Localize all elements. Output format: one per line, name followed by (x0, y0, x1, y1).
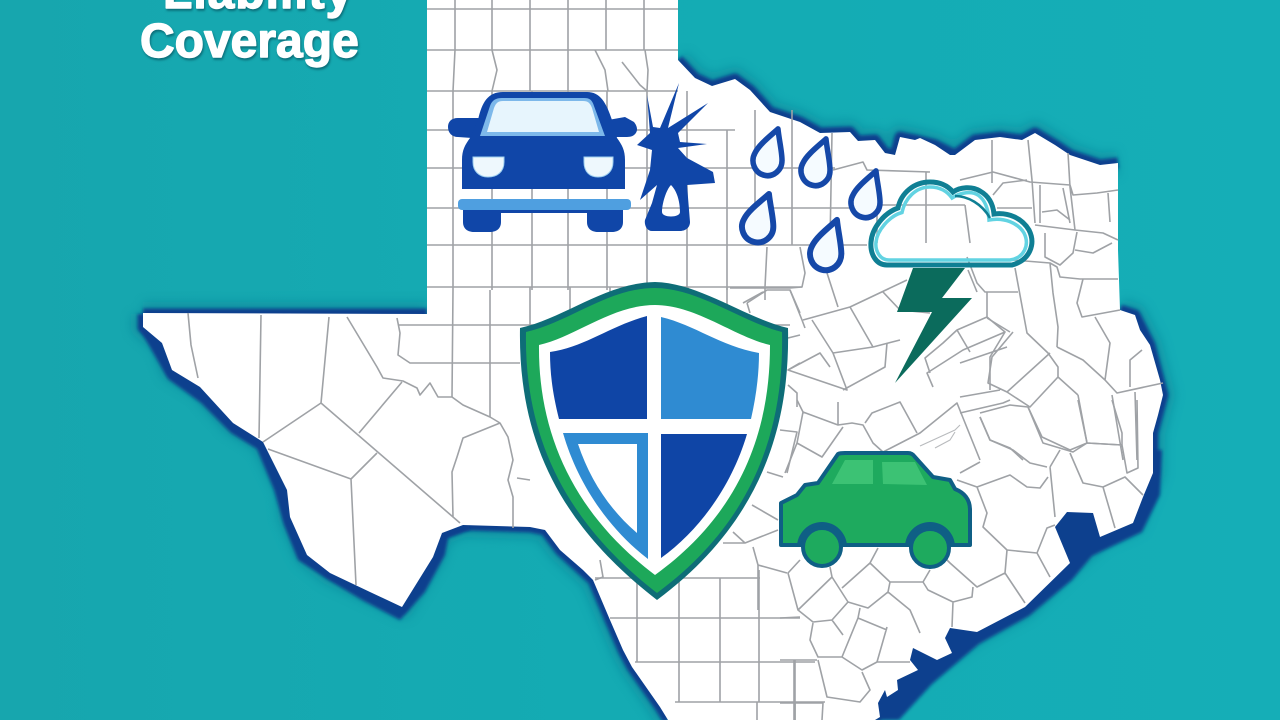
rain drop 4 (851, 171, 880, 218)
shield bottom-left quadrant (563, 433, 648, 559)
green car windows (832, 460, 927, 485)
map shadow glow (143, 60, 1163, 720)
rain drop 3 (742, 194, 773, 242)
green car body (781, 453, 970, 545)
car body (462, 92, 625, 189)
shield green band (526, 288, 782, 593)
shield white band (539, 305, 770, 575)
map dark blue edge (143, 60, 1163, 720)
rain drop 2 (801, 139, 830, 186)
shield bottom-right quadrant (661, 434, 747, 558)
west coast dark band (139, 328, 470, 620)
car windshield (480, 98, 605, 136)
rain drop 5 (810, 220, 841, 270)
car under bumper (463, 205, 623, 213)
icon: rain drops (742, 129, 880, 270)
icon: storm cloud (871, 182, 1032, 265)
green car wheel arches (797, 522, 955, 547)
car wheels (463, 211, 623, 232)
icon: shield (520, 282, 788, 600)
green car front wheel (803, 528, 841, 566)
icon: green car (781, 453, 970, 567)
crash burst (637, 83, 715, 231)
gulf coast dark band (870, 450, 1162, 720)
icon: crashed blue car (448, 83, 715, 232)
cloud outer outline (871, 182, 1032, 265)
car headlights (473, 157, 504, 177)
shield dark rim (520, 282, 788, 600)
rain drop 1 (753, 129, 782, 176)
county lines (188, 0, 1163, 720)
shield top-right quadrant (661, 317, 759, 419)
icon: lightning bolt (895, 268, 972, 383)
title line: Coverage: Coverage (140, 15, 359, 68)
shield top-left quadrant (550, 316, 647, 419)
cloud inner highlight (876, 187, 1026, 260)
title: Liability Coverage (140, 0, 359, 68)
map: Texas with county lines (139, 0, 1163, 720)
car bumper (458, 199, 631, 210)
green car rear wheel (911, 529, 949, 567)
car mirrors (448, 117, 637, 138)
cloud lobe crease (955, 196, 990, 218)
Texas land (143, 0, 1163, 720)
